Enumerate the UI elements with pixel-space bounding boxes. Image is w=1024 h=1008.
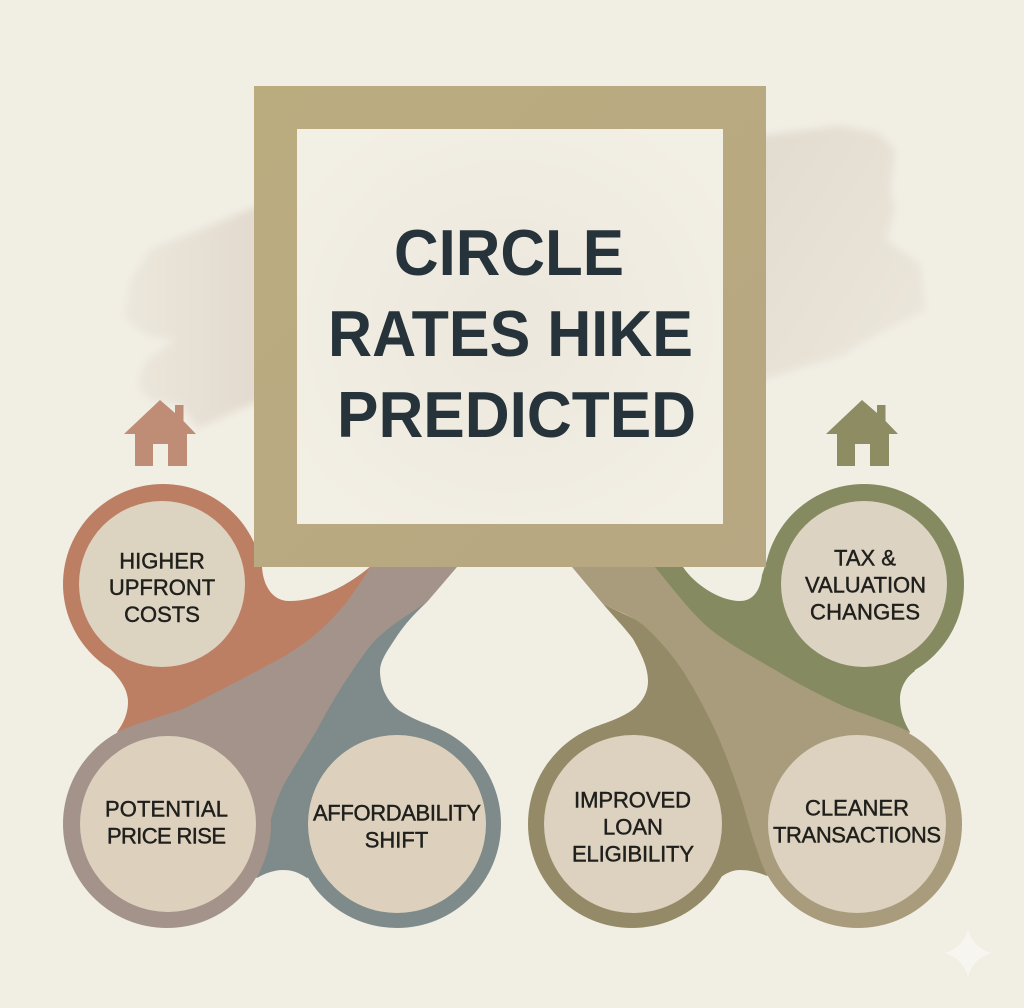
node: cleaner transactions: CLEANER <box>805 796 909 820</box>
node: tax and valuation changes: TAX & <box>834 546 896 570</box>
icon: house right <box>826 400 898 466</box>
node: cleaner transactions: TRANSACTIONS <box>773 822 941 848</box>
node: cleaner transactions <box>768 735 946 913</box>
node: improved loan eligibility <box>544 735 722 913</box>
title: PREDICTED <box>337 378 696 451</box>
right positive impacts cluster <box>528 484 964 928</box>
title frame <box>254 86 766 567</box>
left negative impacts cluster <box>63 484 501 928</box>
node: potential price rise <box>80 736 256 912</box>
left brush stroke <box>125 205 260 428</box>
node: improved loan eligibility: ELIGIBILITY <box>572 842 694 866</box>
node: affordability shift: AFFORDABILITY <box>313 800 481 826</box>
node: improved loan eligibility: IMPROVED <box>574 788 691 812</box>
branch: higher upfront costs <box>63 484 372 732</box>
node: higher upfront costs <box>79 501 245 667</box>
branch: potential price rise <box>63 560 460 928</box>
node: affordability shift: SHIFT <box>365 828 428 852</box>
branch: affordability shift <box>257 602 501 928</box>
branch: improved loan eligibility <box>528 604 800 928</box>
node: potential price rise: PRICE RISE <box>107 824 226 848</box>
node: tax and valuation changes: CHANGES <box>810 600 920 624</box>
title: RATES HIKE <box>328 297 693 370</box>
branch: cleaner transactions <box>572 560 962 928</box>
icon: house left <box>124 400 196 466</box>
node: higher upfront costs: HIGHER <box>119 548 205 574</box>
node: affordability shift <box>308 735 486 913</box>
node: higher upfront costs: UPFRONT <box>109 575 215 600</box>
branch: tax and valuation changes <box>650 484 964 732</box>
right brush stroke <box>760 126 925 380</box>
node: tax and valuation changes: VALUATION <box>805 572 926 598</box>
icon: sparkle <box>944 929 992 977</box>
node: tax and valuation changes <box>781 501 947 667</box>
node: improved loan eligibility: LOAN <box>603 814 663 840</box>
node: higher upfront costs: COSTS <box>124 602 200 627</box>
title: CIRCLE <box>394 216 624 289</box>
title <box>328 216 696 451</box>
node: potential price rise: POTENTIAL <box>105 796 228 822</box>
